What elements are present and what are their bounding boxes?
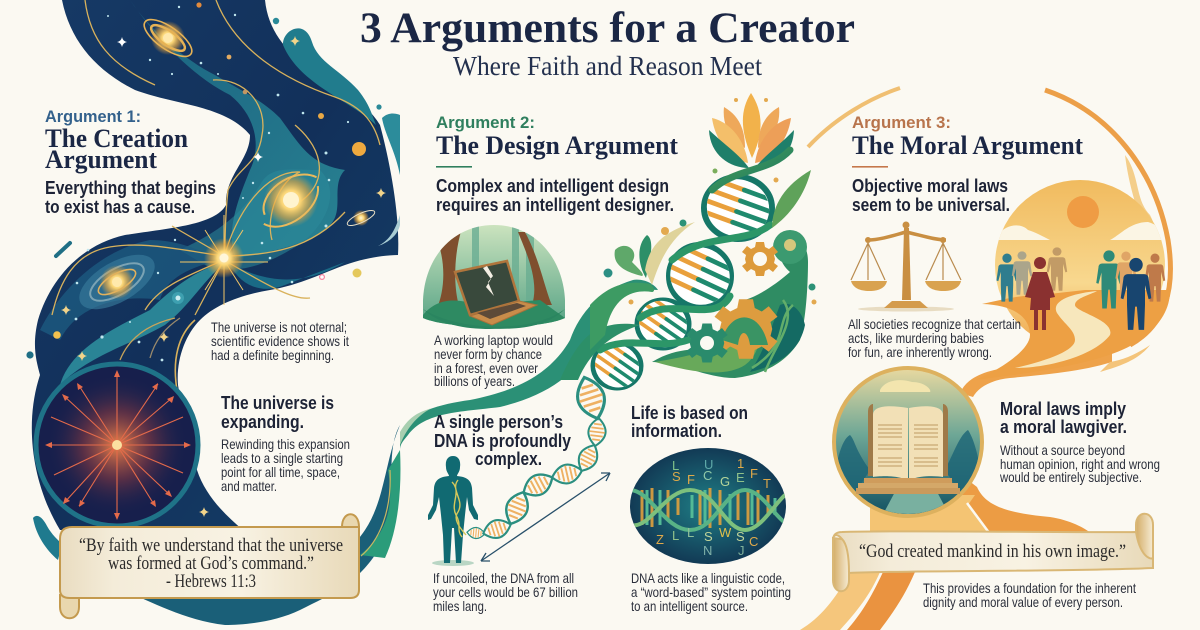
text: code <box>631 570 791 614</box>
scroll: Hebrews quote: - Hebrews 11:3 <box>166 571 256 592</box>
icon: DNA letters code: F <box>687 472 695 487</box>
icon: DNA letters code: Z <box>656 532 664 547</box>
text: not eternal: had a definite beginning. <box>211 347 334 363</box>
text: laptop <box>434 332 553 389</box>
text: information heading: information. <box>631 421 722 441</box>
icon: scales <box>851 222 961 312</box>
icon: DNA letters code: T <box>763 476 771 491</box>
text: claim 1: Everything that begins <box>45 178 216 198</box>
subtitle: Where Faith and Reason Meet <box>453 51 762 81</box>
heading: argument 2: Argument 2: <box>436 113 535 132</box>
heading: argument 1 <box>45 107 189 174</box>
icon: galaxy lower left <box>71 244 163 320</box>
text: DNA length: If uncoiled, the DNA from all <box>433 570 574 586</box>
teal tail under circle <box>33 516 62 560</box>
text: dignity <box>923 580 1136 610</box>
icon: DNA letters code: U <box>704 457 713 472</box>
text: expanding: The universe is <box>221 393 334 413</box>
text: lawgiver: human opinion, right and wrong <box>1000 456 1160 472</box>
text: societies <box>848 316 1021 360</box>
title <box>360 5 855 81</box>
icon: book of moral law <box>832 368 984 520</box>
heading: argument 2 <box>436 113 678 168</box>
text: claim 1: to exist has a cause. <box>45 197 195 217</box>
text: laptop: never form by chance <box>434 346 542 362</box>
text: lawgiver: Moral laws imply <box>1000 399 1126 419</box>
text: code: a “word-based” system pointing <box>631 584 791 600</box>
text: claim 3 <box>852 176 1010 215</box>
icon: laptop in forest <box>423 225 565 329</box>
road <box>1015 291 1110 368</box>
heading: argument 1: Argument <box>45 145 157 174</box>
text: claim 2: requires an intelligent designer. <box>436 195 674 215</box>
text: claim 3: Objective moral laws <box>852 176 1008 196</box>
text: societies: for fun, are inherently wrong. <box>848 344 992 360</box>
icon: human with DNA <box>428 456 478 566</box>
text: not eternal: The universe is not oternal; <box>211 319 347 335</box>
text: laptop: in a forest, even over <box>434 360 538 376</box>
text: code: DNA acts like a linguistic code, <box>631 570 785 586</box>
icon: DNA letters code: J <box>738 543 744 558</box>
heading: argument 1: Argument 1: <box>45 107 141 126</box>
icon: DNA letters code: L <box>672 458 679 473</box>
ribbon: orange moral path <box>800 88 1170 630</box>
scroll: Hebrews quote: was formed at God’s command.” <box>108 553 314 574</box>
heading: argument 3: Argument 3: <box>852 113 951 132</box>
text: societies: All societies recognize that certain <box>848 316 1021 332</box>
icon: DNA letters code: W <box>719 525 732 540</box>
icon: DNA letters code: F <box>750 466 758 481</box>
text: lawgiver: a moral lawgiver. <box>1000 417 1127 437</box>
text: dignity: dignity and moral value of every person. <box>923 594 1123 610</box>
text: lawgiver <box>999 399 1160 485</box>
icon: DNA letters code: E <box>736 470 745 485</box>
icon: expanding universe circle <box>36 364 198 526</box>
teal lobe far right <box>382 113 400 175</box>
text: societies: acts, like murdering babies <box>848 330 984 346</box>
icon: people on a path <box>982 180 1170 370</box>
icon: DNA letters code: 1 <box>737 456 744 471</box>
text: expanding: and matter. <box>221 478 277 494</box>
text: DNA heading: A single person’s <box>434 412 563 432</box>
text: claim 3: seem to be universal. <box>852 195 1010 215</box>
icon: galaxy top <box>135 8 201 68</box>
text: expanding: leads to a single starting <box>221 450 343 466</box>
scroll: image of God quote <box>833 514 1153 591</box>
text: claim 1 <box>45 178 216 217</box>
icon: DNA letters code: L <box>672 528 679 543</box>
text: code: to an intelligent source. <box>631 598 748 614</box>
text: DNA length: your cells would be 67 billion <box>433 584 578 600</box>
icon: DNA letters code <box>630 448 795 564</box>
text: lawgiver: would be entirely subjective. <box>999 469 1142 485</box>
icon: DNA letters code: C <box>703 468 712 483</box>
icon: uncoiling DNA strand <box>467 373 610 542</box>
icon: galaxy middle <box>246 158 334 243</box>
heading: argument 2: The Design Argument <box>436 131 678 160</box>
icon: DNA letters code: S <box>704 529 713 544</box>
text: laptop: billions of years. <box>434 373 515 389</box>
illustration: DNA tree <box>400 93 816 450</box>
text: expanding: point for all time, space, <box>221 464 340 480</box>
text: DNA heading: complex. <box>475 449 542 469</box>
scroll: Hebrews quote: “By faith we understand that the universe <box>79 535 343 556</box>
text: not eternal: scientific evidence shows it <box>211 333 349 349</box>
heading: argument 3 <box>852 113 1083 168</box>
text: expanding: Rewinding this expansion <box>221 436 350 452</box>
text: claim 2: Complex and intelligent design <box>436 176 669 196</box>
text: DNA length <box>433 570 578 614</box>
heading: argument 1: The Creation <box>45 124 189 153</box>
left leaf ribbon <box>560 324 640 380</box>
icon: central starburst <box>180 215 268 305</box>
icon: DNA letters code: C <box>749 534 758 549</box>
icon: DNA letters code: G <box>720 474 730 489</box>
text: expanding: expanding. <box>221 412 304 432</box>
icon: DNA letters code: S <box>672 469 681 484</box>
arrow: length of DNA <box>481 473 610 561</box>
text: DNA length: miles lang. <box>433 598 487 614</box>
text: DNA heading: DNA is profoundly <box>434 431 571 451</box>
text: information heading: Life is based on <box>631 403 748 423</box>
title: 3 Arguments for a Creator <box>360 5 855 52</box>
text: claim 2 <box>436 176 674 215</box>
text: laptop: A working laptop would <box>434 332 553 348</box>
scroll: Hebrews quote <box>60 514 359 618</box>
text: information heading <box>631 403 748 441</box>
teal wisp top right <box>283 28 376 125</box>
text: not eternal <box>211 319 349 363</box>
icon: DNA letters code: L <box>687 525 694 540</box>
heading: argument 3: The Moral Argument <box>852 131 1083 160</box>
green swoop ribbon <box>400 280 658 450</box>
ground <box>975 290 1170 380</box>
text: DNA heading <box>434 412 571 469</box>
flower <box>709 93 794 168</box>
icon: DNA letters code: S <box>736 529 745 544</box>
icon: DNA letters code: N <box>703 543 712 558</box>
text: lawgiver: Without a source beyond <box>1000 442 1125 458</box>
scroll: image of God quote: “God created mankind in his own image.” <box>859 541 1126 562</box>
ribbon: teal and green lower sweep <box>33 425 404 625</box>
green blob with gears <box>652 231 808 378</box>
gold flow lines <box>52 0 380 390</box>
text: expanding <box>221 393 350 494</box>
text: dignity: This provides a foundation for the inherent <box>923 580 1136 596</box>
icon: planets and stars <box>53 2 386 517</box>
leaves and dots <box>639 235 651 278</box>
